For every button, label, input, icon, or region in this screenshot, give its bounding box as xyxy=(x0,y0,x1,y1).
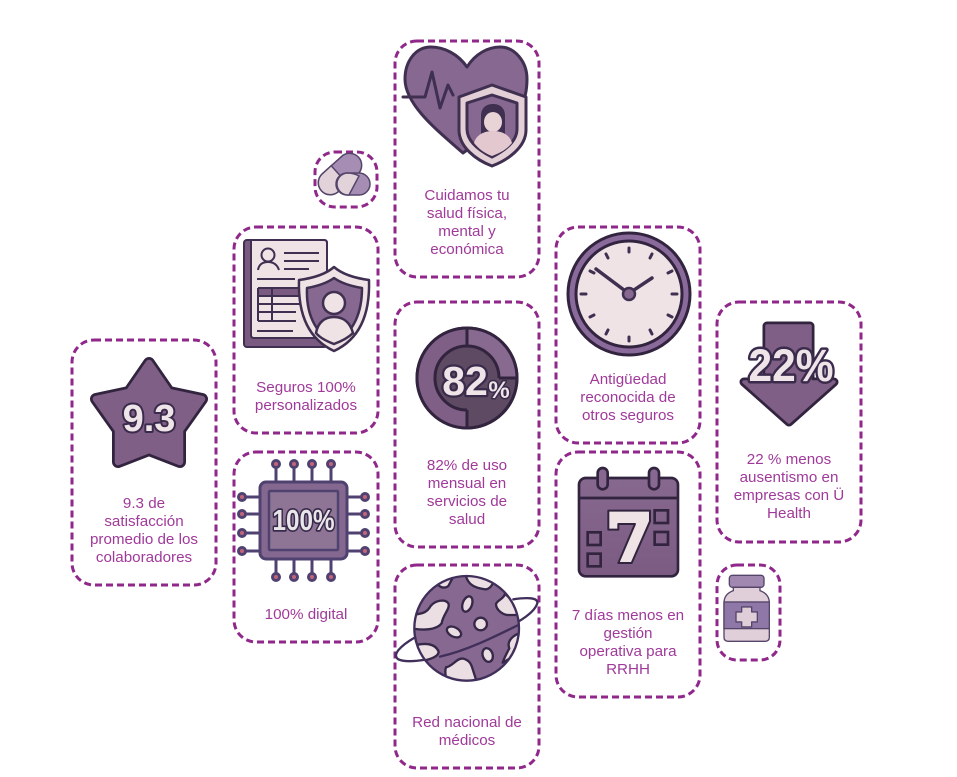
icon: bottle xyxy=(724,575,769,641)
caption: Seguros 100% xyxy=(256,379,356,396)
caption: ausentismo en xyxy=(740,469,838,486)
icon: clock xyxy=(568,233,690,355)
caption: promedio de los xyxy=(90,531,198,548)
icon: down arrow 22% xyxy=(744,326,834,422)
panel: seniority xyxy=(556,227,700,443)
caption: reconocida de xyxy=(580,389,676,406)
panel: digital xyxy=(234,452,378,642)
panel: personalised insurance xyxy=(234,227,378,433)
caption: 22 % menos xyxy=(747,451,832,468)
caption: RRHH xyxy=(606,661,650,678)
caption: Cuidamos tu xyxy=(424,187,510,204)
icon: document with shield xyxy=(244,240,369,351)
caption: colaboradores xyxy=(96,549,193,566)
caption: 82% de uso xyxy=(427,457,507,474)
caption: operativa para xyxy=(579,643,677,660)
caption: Red nacional de xyxy=(412,714,522,731)
caption: servicios de xyxy=(427,493,507,510)
caption: 9.3 de xyxy=(123,495,165,512)
icon: donut 82% xyxy=(417,328,517,428)
panel: medicine bottle xyxy=(717,565,780,660)
icon: star 9.3: 9.3 xyxy=(123,398,175,440)
caption: satisfacción xyxy=(104,513,184,530)
caption: otros seguros xyxy=(582,407,674,424)
panel: absenteeism xyxy=(717,302,861,542)
icon: donut 82%: % xyxy=(488,377,510,404)
icon: calendar 7 xyxy=(579,468,678,576)
caption: gestión xyxy=(604,625,652,642)
caption: empresas con Ü xyxy=(734,486,844,504)
icon: planet xyxy=(396,573,537,687)
infographic canvas xyxy=(70,40,862,770)
icon: donut 82%: 82 xyxy=(442,358,488,404)
panel: medical network xyxy=(395,565,539,768)
caption: Health xyxy=(767,505,811,522)
panel: satisfaction xyxy=(72,340,216,585)
icon: chip 100% xyxy=(238,460,368,580)
panel: heart health xyxy=(395,41,539,277)
caption: personalizados xyxy=(255,397,357,414)
caption: salud xyxy=(449,511,485,528)
panel: HR management xyxy=(556,452,700,697)
icon: heart with shield and person xyxy=(403,47,527,166)
icon: star 9.3 xyxy=(96,363,202,462)
panel: pills xyxy=(313,148,377,207)
icon: capsules xyxy=(313,148,370,200)
caption: mental y xyxy=(438,223,496,240)
caption: 7 días menos en xyxy=(572,607,684,624)
caption: salud física, xyxy=(427,205,507,222)
icon: down arrow 22%: 22% xyxy=(748,340,834,391)
caption: médicos xyxy=(439,732,496,749)
caption: mensual en xyxy=(428,475,506,492)
caption: económica xyxy=(430,241,504,258)
caption: 100% digital xyxy=(265,606,347,623)
panel: monthly use xyxy=(395,302,539,547)
icon: chip 100%: 100% xyxy=(272,505,335,537)
caption: Antigüedad xyxy=(590,371,666,388)
